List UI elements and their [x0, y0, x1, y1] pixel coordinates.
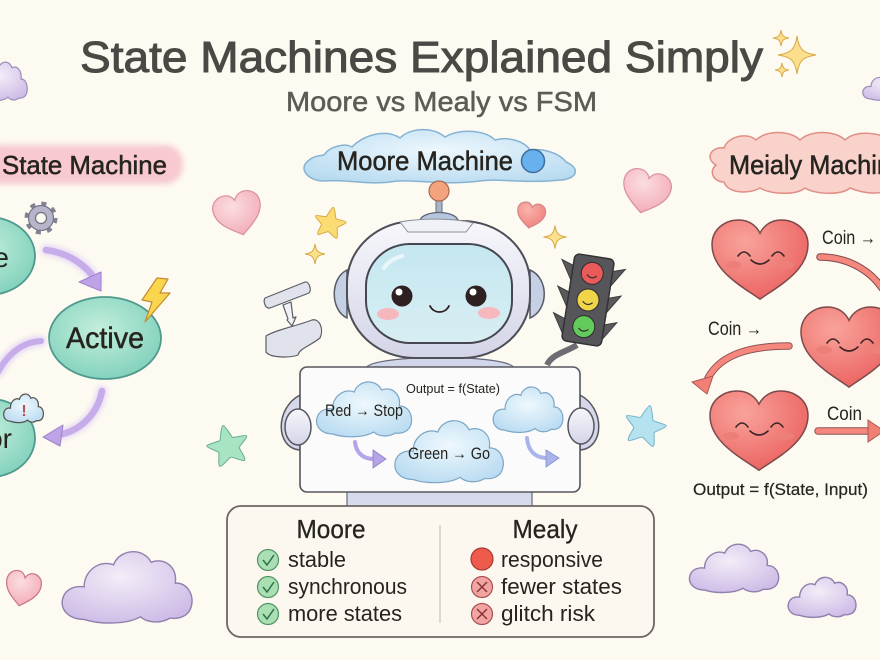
- subtitle: Moore vs Mealy vs FSM: [286, 86, 597, 117]
- column: moore: Moore: [296, 514, 366, 544]
- robot cheeks: [377, 307, 500, 320]
- arrow: active to error: [43, 391, 102, 446]
- robot ears: [334, 270, 544, 318]
- arrow: green onward: [527, 438, 559, 467]
- icon: title sparkles: [773, 30, 816, 77]
- text: fewer states: fewer states: [501, 574, 622, 599]
- state: active: Active: [66, 322, 144, 355]
- state: active: [49, 297, 161, 379]
- arrow: heart three onward: [818, 420, 880, 442]
- arrow: red to green: [355, 442, 386, 468]
- label: coin bottom: Coin: [827, 404, 862, 425]
- robot head: [347, 221, 530, 358]
- arrow: active back to idle: [0, 341, 41, 372]
- icon: check synchronous: [258, 576, 278, 598]
- text: more states: more states: [288, 601, 402, 626]
- column divider: [439, 525, 441, 623]
- icon: bottom left heart: [2, 569, 43, 609]
- icon: small sparkle: [305, 244, 325, 264]
- icon: blue star: [621, 401, 670, 448]
- column: mealy: [471, 514, 622, 626]
- column: moore: [258, 514, 407, 626]
- decorative cloud top right: [863, 73, 880, 100]
- text: responsive: responsive: [501, 547, 603, 572]
- icon: traffic light: [547, 252, 626, 365]
- icon: red dot responsive: [471, 548, 493, 570]
- title: State Machines Explained Simply: [80, 33, 763, 82]
- state: error: [0, 399, 35, 477]
- robot visor highlight: [384, 256, 402, 268]
- decorative cloud top left: [0, 62, 27, 101]
- robot eyes: [392, 286, 486, 306]
- panel: mealy machine: [692, 132, 880, 499]
- text: stable: stable: [288, 547, 346, 572]
- icon: cross glitch risk: [472, 604, 492, 624]
- cloud: bottom left lilac: [62, 552, 192, 623]
- cloud: empty: [493, 387, 563, 432]
- cloud: red to stop: Red → Stop: [325, 401, 403, 420]
- robot antenna: [420, 181, 458, 220]
- icon: lightning bolt: [142, 278, 170, 322]
- robot arms: [281, 395, 599, 450]
- icon: yellow star: [312, 204, 349, 240]
- cloud: green to go: [395, 421, 503, 483]
- cloud: green to go: Green → Go: [408, 444, 490, 463]
- icon: small pink heart: [515, 201, 547, 230]
- icon: check more states: [258, 604, 278, 624]
- state: idle: [0, 217, 35, 295]
- robot shoulders: [366, 358, 514, 368]
- robot torso below board: [347, 490, 532, 507]
- heading: state machine banner: State Machine: [2, 150, 167, 180]
- heading: moore machine cloud: [304, 130, 575, 183]
- robot head plate: [400, 219, 473, 232]
- icon: camera device: [264, 282, 322, 357]
- robot visor: [366, 244, 512, 343]
- panel: finite state machine: [0, 145, 183, 477]
- text: glitch risk: glitch risk: [501, 601, 596, 626]
- icon: check stable: [258, 550, 278, 570]
- icon: cross fewer states: [472, 576, 492, 598]
- diagram board: [300, 367, 580, 492]
- state: heart one: [712, 220, 808, 299]
- icon: pink heart left: [210, 188, 267, 240]
- arrow: heart one to two: [820, 257, 880, 288]
- robot smile: [430, 306, 449, 312]
- icon: green star: [203, 421, 252, 468]
- column: mealy: Mealy: [512, 514, 578, 544]
- icon: warning cloud: !: [21, 403, 27, 420]
- text: output formula: Output = f(State): [406, 382, 500, 396]
- heading: state machine banner: [0, 145, 183, 184]
- robot hands: [285, 408, 594, 445]
- icon: gear: [28, 205, 54, 231]
- icon: pink heart right: [617, 166, 674, 218]
- icon: right sparkle: [544, 226, 566, 248]
- text: synchronous: synchronous: [288, 574, 407, 599]
- robot: [334, 181, 544, 368]
- state: heart two: [801, 307, 880, 387]
- cloud: bottom right lilac large: [689, 544, 779, 592]
- cloud: red to stop: [317, 382, 412, 437]
- text: mealy output formula: Output = f(State, Input): [693, 480, 868, 499]
- panel: moore machine: [203, 130, 674, 637]
- arrow: idle to active: [46, 250, 101, 291]
- arrow: heart two to three: [692, 346, 789, 394]
- label: coin left: Coin →: [708, 319, 762, 340]
- cloud: bottom right lilac small: [788, 577, 856, 617]
- heading: meialy machine cloud: [710, 132, 880, 193]
- comparison card: [227, 506, 654, 637]
- state: heart three: [710, 391, 808, 470]
- icon: warning cloud: [4, 394, 43, 423]
- heading: moore machine cloud: Moore Machine: [337, 146, 513, 176]
